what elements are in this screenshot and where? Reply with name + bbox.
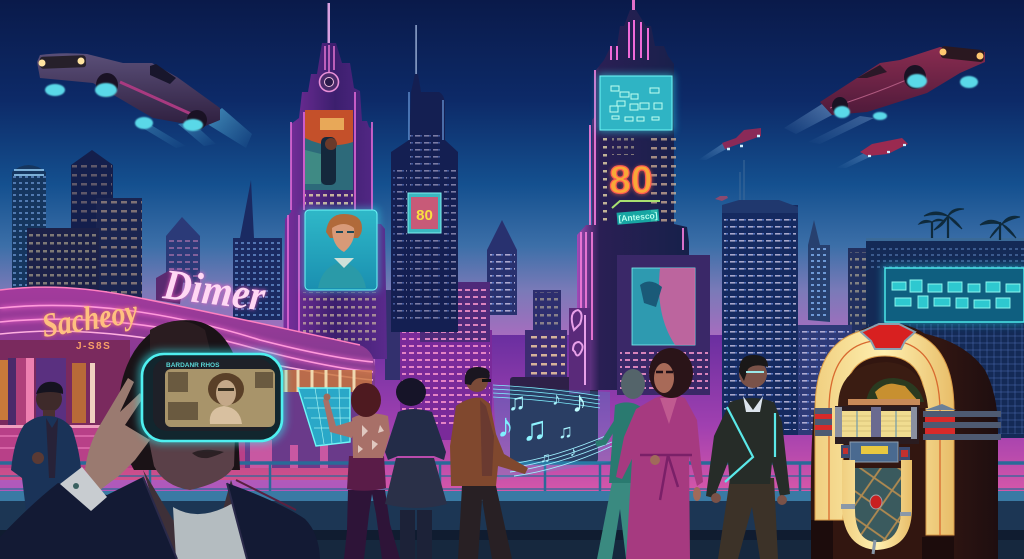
neon 80 sign: 80 xyxy=(609,159,653,202)
jukebox xyxy=(811,323,1001,559)
flying car: small upper xyxy=(698,128,761,160)
headset screen xyxy=(165,369,275,427)
neck and t-shirt xyxy=(143,470,241,559)
music note hologram: ♪ xyxy=(570,444,576,459)
right and middle skyline buildings xyxy=(385,220,1024,462)
person: man in neon-trim vest xyxy=(706,355,790,559)
person: foreground woman in VR headset xyxy=(0,320,320,559)
face xyxy=(148,436,235,490)
right car hover jets xyxy=(834,74,978,120)
building with cyan and pink poster xyxy=(617,255,710,395)
music note hologram: ♪ xyxy=(572,386,587,419)
holographic keyboard panel xyxy=(298,388,350,446)
cabinet xyxy=(860,330,998,559)
jacket xyxy=(0,477,320,559)
song selector xyxy=(835,406,919,444)
person: woman in floral blouse xyxy=(323,383,400,559)
cyan holographic building screen xyxy=(882,265,1024,325)
top badge xyxy=(861,324,915,349)
flying car: large left xyxy=(37,53,252,148)
skyscraper 2: dark blue tower with 80 screen xyxy=(391,25,458,332)
dome window xyxy=(838,362,928,408)
cream arch xyxy=(815,328,954,535)
music note hologram: ♪ xyxy=(497,407,514,445)
left car hover jets xyxy=(45,83,203,131)
poster: cyan hologram portrait xyxy=(303,208,379,292)
music note hologram: ♫ xyxy=(540,449,550,465)
shirt cuff xyxy=(60,467,107,511)
cyan circuit screen xyxy=(598,74,674,132)
neon sign: Sacheoy: Sacheoy xyxy=(39,293,141,345)
person: man in dark jacket, left xyxy=(11,382,81,510)
music note hologram xyxy=(493,385,612,480)
flying car: small lower xyxy=(836,138,908,168)
person: woman in navy skirt xyxy=(385,378,447,559)
music note hologram: ♫ xyxy=(522,410,548,448)
left skyline buildings xyxy=(12,150,282,320)
flying car: large right xyxy=(784,46,985,144)
neon label: [Antesco] xyxy=(618,210,658,224)
hand xyxy=(85,378,150,490)
headset text: BARDANR RHOS xyxy=(166,362,220,369)
palm trees xyxy=(919,209,1020,240)
screen number: 80 xyxy=(416,207,433,224)
control panel xyxy=(841,442,910,462)
neon sign: Sacheoy: J-S8S xyxy=(76,341,111,352)
neon 80 sign: 80 xyxy=(609,159,653,203)
neon sign: Sacheoy: Sacheoy xyxy=(39,293,141,345)
neon sign: Dimer: Dimer xyxy=(160,261,269,320)
headset xyxy=(138,350,286,444)
person: man in brown jacket xyxy=(450,367,528,559)
magenta glow band of distant city xyxy=(375,335,1024,500)
chrome bands xyxy=(815,404,1001,440)
flying car: distant xyxy=(715,196,728,201)
person: woman in pink robe dress xyxy=(616,348,703,559)
neon tube building at tower foot xyxy=(569,308,590,394)
music note hologram: ♪ xyxy=(552,389,561,409)
music note hologram: ♫ xyxy=(558,421,573,443)
tall blue office block xyxy=(722,160,798,435)
person: woman in teal suit xyxy=(596,369,645,559)
skyscraper 1: pink deco tower with posters xyxy=(283,3,387,359)
skyscraper 3: tall magenta tower xyxy=(577,0,689,390)
hair xyxy=(117,320,240,470)
rooftop railing xyxy=(0,463,1024,493)
music note hologram: ♫ xyxy=(508,389,526,416)
speaker grille xyxy=(841,460,912,554)
neon sign: Dimer: Dimer xyxy=(160,261,269,320)
diner building xyxy=(0,287,375,480)
rooftop deck floor xyxy=(0,491,1024,559)
poster: retro figure xyxy=(305,110,353,190)
